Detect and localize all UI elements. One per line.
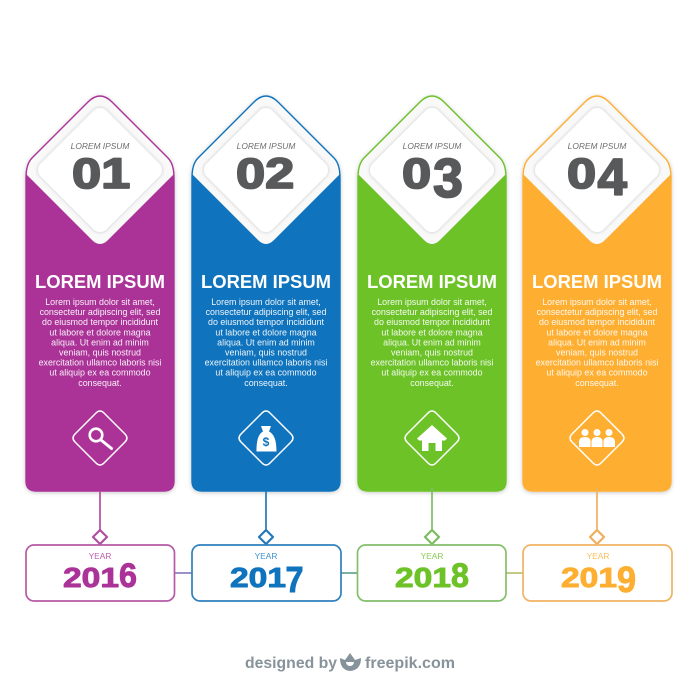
body text: ut labore et dolore magna [49,327,151,337]
heading: LOREM IPSUM [367,271,497,292]
label: lorem ipsum small: LOREM IPSUM [403,141,461,151]
icon: freepik mascot [340,653,361,671]
year box 2018 [358,545,506,601]
body text: aliqua. Ut enim ad minim [51,337,149,347]
body text: consequat. [575,378,619,388]
body text: do eiusmod tempor incididunt [208,317,324,327]
body text: consequat. [244,378,288,388]
body text: consectetur adipiscing elit, sed [372,307,492,317]
body text: Lorem ipsum dolor sit amet, [211,297,321,307]
body text: Lorem ipsum dolor sit amet, [45,297,155,307]
year box 2016: 201 [63,562,119,593]
number 02: 02 [236,150,294,198]
number 03 [402,148,463,209]
number 01: 01 [72,150,130,198]
year box 2017: 7 [286,560,304,600]
number 04: 4 [598,148,627,207]
icon: house in diamond [405,411,459,465]
body text: exercitation ullamco laboris nisi [536,358,658,368]
body text: aliqua. Ut enim ad minim [217,337,315,347]
label: lorem ipsum small: LOREM IPSUM [71,141,129,151]
body text: do eiusmod tempor incididunt [539,317,655,327]
number 03: 0 [402,150,431,198]
body text: Lorem ipsum dolor sit amet, [377,297,487,307]
body text: ut aliquip ex ea commodo [546,368,648,378]
year box 2019: 9 [617,560,636,600]
connector: orange stem [590,488,604,544]
year box 2019 [523,545,672,601]
body text: ut aliquip ex ea commodo [381,368,483,378]
body text: aliqua. Ut enim ad minim [548,337,646,347]
icon: magnifier in diamond [73,411,127,465]
icon: people in diamond [570,411,624,465]
panel: 2016 purple column [26,96,174,491]
heading: LOREM IPSUM [35,271,165,292]
connector: green stem [425,488,439,544]
year box 2016: 6 [119,557,137,595]
body text: ut labore et dolore magna [546,327,648,337]
body text: veniam, quis nostrud [59,348,141,358]
connector: between year boxes [174,572,523,574]
body text: ut aliquip ex ea commodo [49,368,151,378]
body text: veniam, quis nostrud [556,348,638,358]
footer: freepik credit: designed by [245,655,337,672]
year box 2017: YEAR [255,551,277,561]
body text: exercitation ullamco laboris nisi [39,358,161,368]
connector: purple stem [93,491,107,544]
label: lorem ipsum small: LOREM IPSUM [568,141,626,151]
number 03: 3 [433,148,463,209]
year box 2016: YEAR [89,551,111,561]
body text: do eiusmod tempor incididunt [42,317,158,327]
year box 2019: 201 [561,562,617,593]
body text: consequat. [78,378,122,388]
label: lorem ipsum small: LOREM IPSUM [237,141,295,151]
year box 2019: YEAR [587,551,609,561]
number 04: 0 [567,150,596,198]
body text: aliqua. Ut enim ad minim [383,337,481,347]
year box 2018: YEAR [421,551,443,561]
year box 2017 [192,545,341,601]
footer: freepik credit [245,653,455,672]
heading: LOREM IPSUM [201,271,331,292]
body text: veniam, quis nostrud [225,348,307,358]
body text: veniam, quis nostrud [391,348,473,358]
body text: consectetur adipiscing elit, sed [40,307,160,317]
body text: ut labore et dolore magna [381,327,483,337]
body text: consectetur adipiscing elit, sed [537,307,657,317]
body text: Lorem ipsum dolor sit amet, [542,297,652,307]
year box 2016 [26,545,174,601]
body text: exercitation ullamco laboris nisi [371,358,493,368]
body text: consequat. [410,378,454,388]
connector: blue stem [259,491,273,544]
panel: 2018 green column [358,96,506,491]
body text: consectetur adipiscing elit, sed [206,307,326,317]
year box 2018: 8 [451,557,469,595]
panel: 2017 blue column [192,96,340,491]
body text: exercitation ullamco laboris nisi [205,358,327,368]
heading: LOREM IPSUM [532,271,662,292]
icon: money bag in diamond [239,411,293,465]
footer: freepik credit: freepik.com [365,655,455,672]
year box 2018: 201 [395,562,451,593]
body text: ut labore et dolore magna [215,327,317,337]
body text: do eiusmod tempor incididunt [374,317,490,327]
number 04 [567,148,627,207]
body text: ut aliquip ex ea commodo [215,368,317,378]
icon: money bag in diamond: $ [263,435,270,449]
year box 2017: 201 [230,562,286,593]
panel: 2019 orange column [523,96,671,491]
